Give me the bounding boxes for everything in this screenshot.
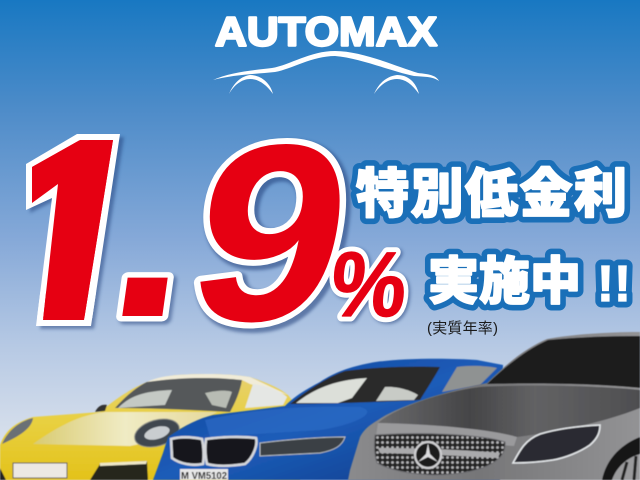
note: annual percentage rate: (実質年率) — [427, 319, 498, 337]
heading: 実施中 !!: !! — [597, 255, 631, 312]
heading: 特別低金利: 特別低金利 — [356, 165, 628, 224]
heading: 実施中 !!: !! — [597, 255, 631, 312]
Mercedes windshield — [487, 336, 640, 388]
percent sign: % — [326, 233, 412, 336]
yellow car windshield — [115, 378, 242, 412]
Mercedes headlight — [513, 425, 600, 463]
Mercedes star emblem — [415, 442, 441, 468]
heading: 実施中 !!: 実施中 — [428, 253, 581, 310]
BMW number plate — [180, 469, 228, 480]
yellow car hood highlight — [33, 412, 217, 446]
BMW bonnet highlight — [205, 407, 367, 437]
headline rate: 1.9% — [26, 134, 412, 335]
Mercedes grille — [374, 434, 505, 475]
BMW body — [153, 359, 503, 480]
decimal point: . — [95, 82, 215, 371]
percent sign: % — [326, 233, 412, 336]
logo wordmark: AUTOMAX — [215, 8, 437, 54]
BMW kidney grille — [171, 437, 256, 466]
Mercedes wheel — [602, 437, 640, 480]
digit 1 — [26, 134, 125, 331]
BMW headlight — [260, 437, 345, 456]
yellow car mirror — [95, 405, 107, 412]
logo: AUTOMAX — [213, 8, 439, 94]
yellow car body — [0, 374, 300, 480]
car: yellow sports car — [0, 374, 300, 480]
yellow car headlights — [131, 414, 183, 452]
yellow car plate and intake — [13, 463, 67, 478]
heading: 特別低金利: 特別低金利 — [356, 165, 628, 224]
car: blue BMW — [153, 359, 503, 480]
percent sign: % — [328, 235, 414, 338]
digit 9: 9 — [175, 95, 374, 377]
BMW side window — [442, 366, 497, 392]
Mercedes bonnet — [378, 386, 640, 437]
yellow car roof — [147, 374, 288, 395]
BMW windshield — [290, 367, 440, 404]
yellow car side window — [245, 384, 287, 408]
logo car silhouette — [213, 51, 439, 94]
Mercedes body — [348, 332, 640, 480]
heading: 実施中 !!: 実施中 — [428, 253, 581, 310]
car: grey Mercedes — [348, 332, 640, 480]
digit 9: 9 — [172, 92, 371, 374]
decimal point: . — [98, 85, 218, 374]
